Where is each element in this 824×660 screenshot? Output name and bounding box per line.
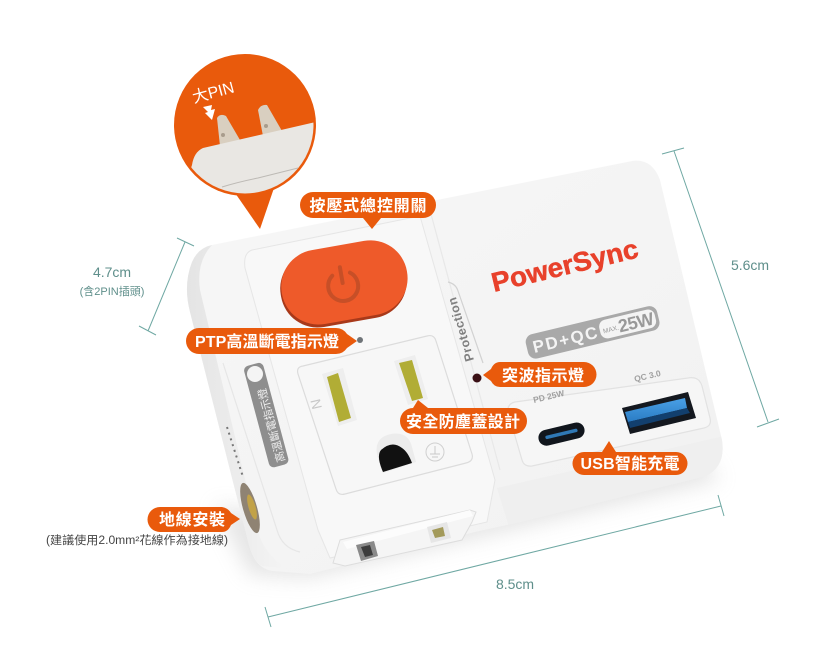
label: ground wire installation — [147, 507, 240, 532]
body silhouette — [187, 161, 723, 574]
lower band of body — [497, 436, 728, 530]
left side face — [187, 245, 285, 568]
dimension: 8.5cm: 8.5cm — [496, 576, 534, 592]
arrow to pin — [203, 105, 215, 120]
port label: PD 25W: PD 25W — [532, 388, 566, 405]
label: push master switch: 按壓式總控開關 — [310, 196, 426, 215]
badge: PD + QC MAX 25W — [524, 304, 661, 360]
label: PTP indicator — [186, 328, 357, 354]
switch module plate — [245, 216, 495, 558]
right slot — [394, 355, 428, 405]
dimension: 8.5cm — [265, 495, 724, 627]
label: safety shutter: 安全防塵蓋設計 — [406, 412, 520, 431]
bottom folding plug — [333, 510, 476, 566]
side label: PTP indicator: 高溫斷電指示燈 — [255, 387, 288, 464]
USB-A port — [622, 392, 696, 434]
dimension: 5.6cm — [662, 148, 779, 427]
label: surge indicator: 突波指示燈 — [502, 366, 584, 385]
surge indicator light — [472, 374, 482, 382]
USB-C port — [537, 421, 586, 447]
label: ground wire installation: 地線安裝 — [159, 510, 225, 529]
power button — [274, 234, 413, 333]
callout magnifier: large PIN — [174, 54, 320, 229]
label: safety shutter — [400, 400, 527, 434]
label: PTP indicator: PTP高溫斷電指示燈 — [195, 332, 339, 351]
large PIN label: 大PIN — [190, 78, 236, 107]
left slot — [322, 368, 357, 426]
side label: PTP indicator — [243, 362, 289, 468]
label: USB smart charging: USB智能充電 — [580, 454, 680, 473]
label: surge indicator — [483, 362, 596, 387]
plug body — [191, 122, 314, 194]
protection label strip: Protection — [445, 296, 477, 363]
badge: PD + QC MAX 25W: MAX. — [602, 325, 620, 335]
label: push master switch — [300, 192, 436, 229]
badge: PD + QC MAX 25W: PD+QC — [531, 323, 599, 357]
ground terminal — [236, 481, 264, 535]
N mark: N — [307, 397, 325, 411]
side small print — [227, 427, 243, 477]
right module seam — [431, 214, 500, 470]
PTP indicator light — [357, 337, 363, 343]
port label: QC 3.0: QC 3.0 — [633, 368, 662, 384]
note: ground wire recommendation: (建議使用2.0mm²花線作為接地線) — [46, 533, 228, 547]
brand logo: PowerSync: PowerSync — [488, 234, 641, 298]
socket plate — [298, 336, 472, 494]
plug prongs — [217, 115, 240, 146]
badge: PD + QC MAX 25W: 25W — [616, 309, 656, 336]
dimension: 4.7cm: 4.7cm — [93, 264, 131, 280]
icon: power symbol — [325, 265, 361, 303]
earth mark — [426, 443, 444, 461]
dimension: 5.6cm: 5.6cm — [731, 257, 769, 273]
label: USB smart charging — [572, 441, 688, 475]
dimension: 4.7cm: (含2PIN插頭) — [80, 284, 144, 298]
ground hole — [377, 434, 416, 473]
device: power strip body — [187, 161, 728, 578]
protection label strip — [445, 282, 483, 363]
dimension: 4.7cm — [80, 238, 194, 335]
USB port panel — [508, 368, 710, 466]
